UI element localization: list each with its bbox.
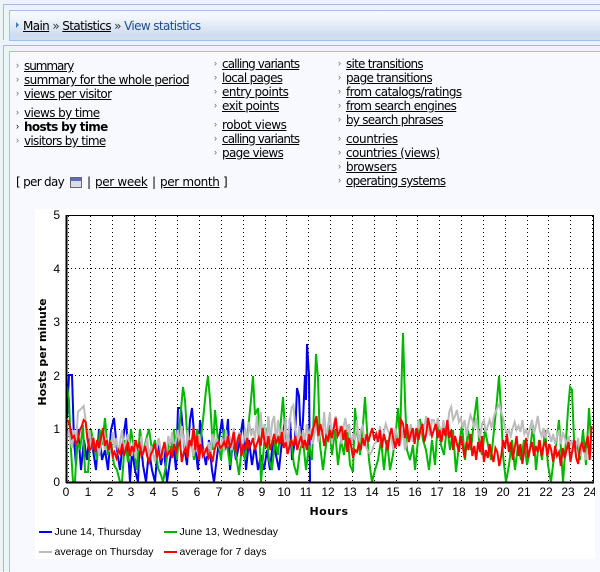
data lines — [67, 333, 592, 482]
menu column 3: › — [338, 86, 341, 96]
menu column 3: page transitions — [346, 71, 432, 85]
y axis labels: 3 — [53, 315, 60, 329]
y axis title: Hosts per minute — [36, 298, 49, 406]
menu column 3: from catalogs/ratings — [346, 85, 462, 99]
period selector: | — [152, 175, 156, 189]
menu column 3: › — [338, 161, 341, 171]
legend — [39, 526, 279, 558]
menu column 3: countries (views) — [346, 146, 439, 160]
y axis labels: 4 — [53, 262, 60, 276]
legend: June 13, Wednesday: June 13, Wednesday — [180, 526, 279, 538]
x axis labels: 16 — [408, 485, 422, 499]
x axis labels: 20 — [496, 485, 510, 499]
menu column 1: views by time — [24, 106, 100, 120]
x axis labels: 0 — [63, 485, 70, 499]
y axis labels: 0 — [53, 475, 60, 489]
menu column 2: › — [214, 58, 217, 68]
menu column 1 — [16, 59, 189, 148]
x axis labels: 8 — [238, 485, 245, 499]
menu column 2: entry points — [222, 85, 288, 99]
menu column 1: visitors by time — [24, 134, 106, 148]
chart: hosts per minute by hour — [36, 209, 595, 558]
x axis labels: 11 — [300, 485, 313, 499]
x axis labels: 15 — [386, 485, 400, 499]
menu column 2: › — [214, 119, 217, 129]
x axis labels: 17 — [430, 485, 444, 499]
menu column 2: robot views — [222, 118, 286, 132]
menu column 3: operating systems — [346, 174, 445, 188]
menu column 3: › — [338, 72, 341, 82]
period selector: per week — [95, 175, 147, 189]
menu column 1: › — [16, 121, 19, 131]
y axis labels: 1 — [53, 422, 60, 436]
x axis labels: 3 — [128, 485, 135, 499]
line: average for 7 days — [68, 416, 592, 466]
line: June 13, Wednesday — [67, 333, 591, 482]
menu column 3: › — [338, 147, 341, 157]
x axis labels: 1 — [85, 485, 92, 499]
menu column 3: from search engines — [346, 99, 456, 113]
x axis labels: 10 — [277, 485, 291, 499]
menu column 1: › — [16, 60, 19, 70]
menu column 2: › — [214, 147, 217, 157]
menu column 2: calling variants — [222, 57, 299, 71]
period selector: | — [87, 175, 91, 189]
menu column 2: exit points — [222, 99, 279, 113]
menu column 1: › — [16, 135, 19, 145]
menu column 3: › — [338, 58, 341, 68]
menu column 1: summary — [24, 59, 73, 73]
menu column 2: › — [214, 133, 217, 143]
x axis labels: 6 — [194, 485, 201, 499]
menu column 1: › — [16, 88, 19, 98]
x axis labels: 14 — [365, 485, 379, 499]
menu column 2: › — [214, 100, 217, 110]
menu column 1: › — [16, 107, 19, 117]
x axis labels: 13 — [343, 485, 357, 499]
axis frame — [66, 215, 594, 483]
x axis labels: 12 — [321, 485, 335, 499]
menu column 3: › — [338, 175, 341, 185]
y axis labels: 2 — [53, 369, 60, 383]
menu column 2 — [214, 57, 300, 160]
x axis labels: 2 — [107, 485, 114, 499]
x axis labels: 5 — [172, 485, 179, 499]
menu column 3: site transitions — [346, 57, 423, 71]
period selector: [ per day — [16, 175, 64, 189]
x axis labels: 7 — [216, 485, 223, 499]
x axis labels: 9 — [259, 485, 266, 499]
line: June 14, Thursday — [67, 344, 310, 482]
legend: average on Thursday: average on Thursday — [54, 546, 154, 558]
menu column 2: local pages — [222, 71, 282, 85]
period selector: ] — [223, 175, 227, 189]
menu column 1: summary for the whole period — [24, 73, 189, 87]
menu column 1: views per visitor — [24, 87, 111, 101]
y axis labels — [53, 208, 60, 489]
x axis labels: 22 — [539, 485, 553, 499]
icon: calendar — [70, 177, 82, 188]
period selector — [16, 175, 227, 189]
period selector: per month — [160, 175, 220, 189]
menu column 3: › — [338, 114, 341, 124]
menu column 3: › — [338, 133, 341, 143]
menu column 3 — [338, 57, 462, 188]
x axis title: Hours — [309, 505, 349, 518]
menu column 2: › — [214, 86, 217, 96]
x axis labels: 23 — [561, 485, 575, 499]
menu column 2: calling variants — [222, 132, 299, 146]
legend: average for 7 days: average for 7 days — [180, 546, 266, 558]
menu column 2: › — [214, 72, 217, 82]
menu column 3: countries — [346, 132, 398, 146]
x axis labels: 19 — [474, 485, 488, 499]
x axis labels: 4 — [150, 485, 157, 499]
breadcrumb arrow — [16, 22, 19, 28]
x axis labels: 21 — [517, 485, 531, 499]
menu column 3: browsers — [346, 160, 397, 174]
breadcrumb bar — [9, 10, 600, 41]
line: average on Thursday — [68, 404, 592, 462]
menu column 2: page views — [222, 146, 283, 160]
menu column 1: › — [16, 74, 19, 84]
x axis labels — [63, 485, 597, 499]
breadcrumb text: Main » Statistics » View statistics — [23, 19, 201, 33]
menu column 3: › — [338, 100, 341, 110]
menu column 3: by search phrases — [346, 113, 443, 127]
menu column 1: hosts by time — [24, 120, 108, 134]
x axis labels: 18 — [452, 485, 466, 499]
legend: June 14, Thursday: June 14, Thursday — [54, 526, 142, 538]
